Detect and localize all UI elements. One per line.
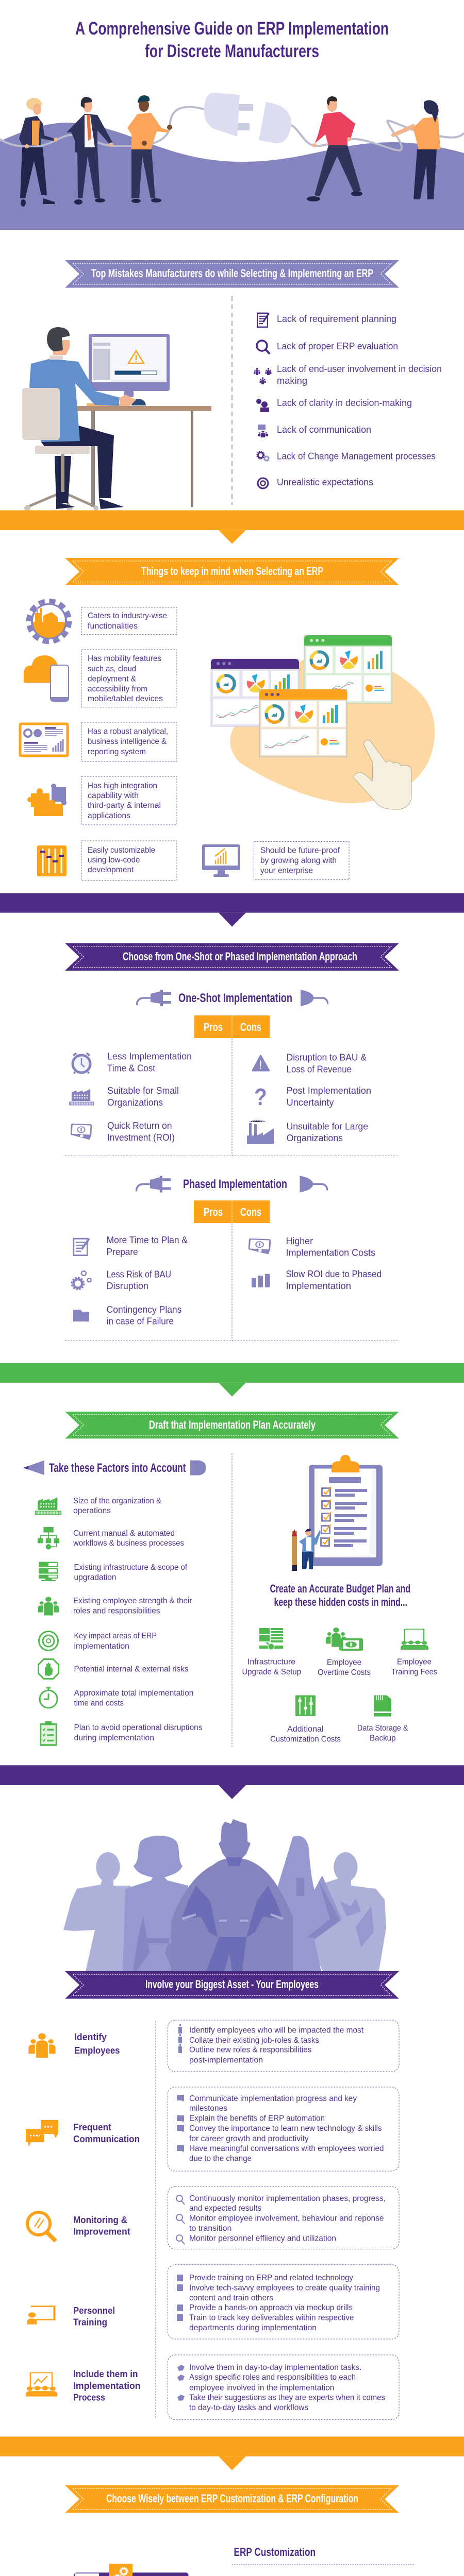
one-shot heading with plugs [137, 990, 328, 1006]
factor: infrastructure: Existing infrastructure & scope of [74, 1563, 188, 1572]
hero right back [308, 1852, 386, 1971]
label [73, 2305, 115, 2328]
illustration: laptop customization [22, 2564, 206, 2576]
con: uncertainty [254, 1083, 371, 1110]
details box: Involve them in day-to-day implementation tasks. [189, 2363, 361, 2372]
details box [168, 2020, 399, 2072]
con: disruption: Loss of Revenue [287, 1063, 352, 1075]
details box: Communicate implementation progress and key [189, 2094, 357, 2103]
factor: risks [38, 1659, 189, 1679]
hidden costs [242, 1628, 437, 1743]
purple window [211, 659, 299, 726]
factor: employee strength: roles and responsibilities [73, 1607, 160, 1616]
factor: workflows: Current manual & automated [73, 1529, 175, 1538]
factor: time and costs: time and costs [74, 1699, 124, 1707]
icon: industry gear [29, 601, 69, 641]
con: slow roi: Slow ROI due to Phased [286, 1268, 382, 1279]
box: mobility: such as, cloud [88, 665, 136, 673]
factor: disruptions [40, 1721, 202, 1746]
cost: overtime [318, 1628, 371, 1677]
box: future-proof: by growing along with [260, 856, 337, 865]
phased heading with plugs: Phased Implementation [183, 1177, 287, 1191]
details box: Involve tech-savvy employees to create quality training [189, 2283, 380, 2292]
details box [168, 2265, 399, 2339]
box: analytics: business intelligence & [88, 737, 167, 746]
pros cons tabs: Pros [204, 1206, 223, 1218]
box: integration: Has high integration [88, 782, 157, 790]
icon: magnifier [27, 2212, 56, 2241]
heading: factors: Take these Factors into Account [49, 1461, 186, 1475]
phased cons [249, 1235, 382, 1291]
box: integration: third-party & internal [88, 801, 161, 810]
item: clarity [256, 397, 412, 412]
cost: overtime: Employee [327, 1658, 361, 1667]
plug [204, 93, 291, 143]
con: higher costs: Implementation Costs [286, 1247, 375, 1258]
cost: storage [357, 1695, 408, 1743]
factor: risks: Potential internal & external risks [74, 1665, 189, 1674]
box: integration: applications [88, 811, 130, 820]
details box: Collate their existing job-roles & tasks [189, 2036, 319, 2045]
person with pencil [292, 1529, 321, 1571]
title: for Discrete Manufacturers [145, 41, 319, 61]
label: Identify [74, 2031, 107, 2042]
box: customizable [81, 841, 177, 880]
box: mobility: deployment & [88, 675, 136, 684]
phased pros [72, 1234, 188, 1326]
person 5 [391, 100, 440, 206]
banner: employees: Involve your Biggest Asset - Your Employees [145, 1978, 319, 1991]
label: Employees [74, 2045, 120, 2056]
cost: customization [270, 1695, 341, 1743]
factor: size: Size of the organization & [73, 1497, 161, 1505]
banner: customization vs configuration: Choose Wisely between ERP Customization & ERP Configuration [106, 2492, 358, 2505]
con: higher costs [249, 1235, 375, 1258]
details box [168, 2355, 399, 2420]
banner: top mistakes [65, 260, 399, 287]
icon: chat bubbles [26, 2120, 58, 2147]
pro: small organizations [69, 1085, 179, 1108]
box: mobility: accessibility from [88, 685, 147, 693]
details box: to day-to-day tasks and workflows [189, 2403, 308, 2412]
item: requirement planning: Lack of requirement planning [277, 313, 396, 324]
label: Include them in [73, 2368, 138, 2379]
details box: Convey the importance to learn new technology & skills [189, 2124, 382, 2133]
row: identify employees [28, 2020, 399, 2072]
item: end-user involvement: making [277, 375, 307, 386]
cost: training fees: Employee [397, 1658, 432, 1667]
factor: impact: implementation [74, 1642, 129, 1651]
pro: more time: Prepare [107, 1246, 138, 1257]
section divider: orange [0, 510, 464, 544]
illustration: dashboards and hand [211, 635, 435, 809]
one-shot heading with plugs: One-Shot Implementation [178, 991, 292, 1005]
orange window [259, 689, 347, 757]
details box: Explain the benefits of ERP automation [189, 2114, 325, 2123]
item: expectations: Unrealistic expectations [277, 477, 373, 487]
banner: implementation plan: Draft that Implementation Plan Accurately [149, 1418, 316, 1431]
person 4 [307, 96, 362, 201]
pro: contingency [73, 1304, 181, 1326]
person 3 [127, 95, 172, 203]
pros cons tabs: Pros [204, 1021, 223, 1033]
cost: infrastructure: Upgrade & Setup [242, 1668, 301, 1676]
box: customizable: using low-code [88, 856, 140, 865]
cost: storage: Backup [370, 1734, 396, 1743]
details box: milestones [189, 2104, 227, 2113]
details box: Continuously monitor implementation phases, progress, [189, 2194, 386, 2203]
illustration: checklist clipboard [292, 1455, 383, 1571]
label: Training [73, 2317, 107, 2328]
illustration: man at computer with warning [22, 327, 211, 511]
label [73, 2122, 140, 2144]
pro: quick roi [71, 1120, 175, 1143]
box: mobility [81, 650, 177, 707]
pros cons tabs [194, 1200, 270, 1223]
details box: departments during implementation [189, 2324, 317, 2332]
factor: time and costs [40, 1688, 194, 1708]
section divider: purple [0, 1765, 464, 1799]
details box: and expected results [189, 2204, 261, 2213]
pro: contingency: in case of Failure [107, 1316, 174, 1326]
details box [168, 2087, 399, 2171]
pro: more time [74, 1234, 188, 1257]
pro: contingency: Contingency Plans [107, 1304, 181, 1315]
details box: due to the change [189, 2155, 252, 2163]
row: frequent communication [26, 2087, 399, 2171]
hero left back [63, 1852, 130, 1971]
details box: Provide training on ERP and related technology [189, 2274, 353, 2282]
details box: content and train others [189, 2294, 273, 2302]
hero woman left [123, 1836, 188, 1971]
pro: less risk: Disruption [107, 1280, 148, 1291]
banner: things to keep in mind: Things to keep in mind when Selecting an ERP [141, 565, 323, 578]
label: Improvement [73, 2226, 130, 2237]
icon: analytics panel [20, 724, 68, 756]
item: evaluation: Lack of proper ERP evaluation [277, 341, 398, 351]
details box: Monitor personnel effiiency and utilization [189, 2234, 336, 2243]
one-shot pros [69, 1051, 192, 1143]
factor: size: operations [73, 1506, 111, 1515]
pros cons tabs [194, 1015, 270, 1038]
cost: infrastructure: Infrastructure [247, 1658, 295, 1667]
card: gears [109, 2564, 132, 2576]
heading: factors [23, 1460, 206, 1476]
one-shot cons [247, 1052, 371, 1144]
section divider: green [0, 1363, 464, 1397]
heading: budget plan [270, 1582, 410, 1608]
label [73, 2368, 141, 2403]
pro: small organizations: Suitable for Small [107, 1085, 179, 1096]
box: customizable: Easily customizable [88, 846, 155, 855]
banner: customization vs configuration [65, 2485, 399, 2513]
person 1 [19, 98, 58, 207]
banner: one-shot or phased [65, 943, 399, 971]
icon: sliders [37, 845, 67, 876]
pros cons tabs: Cons [240, 1206, 261, 1218]
item: end-user involvement: Lack of end-user involvement in decision [277, 363, 442, 374]
box: future-proof [254, 842, 349, 880]
con: large organizations: Unsuitable for Large [287, 1121, 368, 1132]
label: Personnel [73, 2305, 115, 2316]
pro: less risk: Less Risk of BAU [107, 1269, 171, 1280]
banner: employees [65, 1971, 399, 1999]
person 2 [67, 97, 113, 205]
vertical divider [231, 296, 233, 505]
heading: budget plan: Create an Accurate Budget Plan and [270, 1582, 410, 1595]
banner: one-shot or phased: Choose from One-Shot or Phased Implementation Approach [123, 950, 357, 963]
box: industry-wise: functionalities [88, 622, 138, 631]
box: future-proof: Should be future-proof [260, 846, 340, 855]
factor: impact: Key impact areas of ERP [74, 1632, 157, 1640]
title [75, 19, 389, 61]
details box: employee involved in the implementation [189, 2383, 335, 2392]
pro: more time: More Time to Plan & [107, 1234, 188, 1245]
cost: storage: Data Storage & [357, 1724, 408, 1733]
factor: time and costs: Approximate total implementation [74, 1689, 194, 1698]
item: communication: Lack of communication [277, 424, 371, 435]
details box: Provide a hands-on approach via mockup drills [189, 2303, 353, 2312]
con: uncertainty: Post Implementation [287, 1085, 371, 1096]
item: requirement planning [257, 313, 396, 327]
factor: size [35, 1497, 161, 1515]
details box: Have meaningful conversations with employees worried [189, 2144, 384, 2153]
box: integration: capability with [88, 791, 139, 800]
label [73, 2214, 130, 2237]
label: Implementation [73, 2380, 141, 2391]
factors list [35, 1497, 202, 1746]
box: integration [81, 776, 177, 825]
icon: puzzle [27, 784, 67, 816]
item: change management: Lack of Change Management processes [277, 450, 436, 462]
pro: time and cost: Time & Cost [107, 1062, 155, 1073]
section divider: purple [0, 893, 464, 927]
factor: disruptions: Plan to avoid operational disruptions [74, 1723, 202, 1732]
cost: customization: Additional [287, 1725, 324, 1734]
factor: employee strength [38, 1597, 192, 1616]
factor: employee strength: Existing employee strength & their [73, 1597, 192, 1605]
factor: disruptions: during implementation [74, 1734, 154, 1742]
cost: infrastructure [242, 1628, 301, 1676]
details box: to transition [189, 2224, 231, 2233]
con: disruption [253, 1052, 367, 1075]
green window [304, 635, 392, 703]
box: mobility: Has mobility features [88, 654, 161, 663]
box: customizable: development [88, 866, 134, 874]
row: monitoring [27, 2187, 399, 2249]
illustration: employees as superheroes [63, 1819, 386, 1971]
hero centre [171, 1819, 293, 1971]
factor: impact [39, 1631, 157, 1651]
con: uncertainty: Uncertainty [287, 1097, 334, 1108]
pro: less risk [72, 1269, 171, 1291]
box: analytics: reporting system [88, 748, 146, 756]
label: Frequent [73, 2122, 111, 2132]
details box [168, 2187, 399, 2249]
phased heading with plugs [136, 1176, 327, 1193]
label [74, 2031, 120, 2056]
con: uncertainty: ? [254, 1083, 267, 1110]
pros cons tabs: Cons [240, 1021, 261, 1033]
icon: monitor growth [202, 844, 240, 877]
keep in mind panel [20, 601, 349, 880]
heading: budget plan: keep these hidden costs in mind... [274, 1596, 407, 1608]
box: industry-wise: Caters to industry-wise [88, 612, 167, 620]
item: end-user involvement [254, 363, 442, 386]
banner: things to keep in mind [65, 558, 399, 585]
hand [354, 740, 411, 809]
box: industry-wise [81, 607, 177, 635]
pro: time and cost [73, 1051, 192, 1073]
mistakes list [254, 313, 442, 488]
cost: customization: Customization Costs [270, 1735, 341, 1743]
cost: training fees: Training Fees [391, 1668, 437, 1676]
hero illustration: people pulling a plug cable [0, 93, 464, 230]
box: analytics: Has a robust analytical, [88, 727, 168, 736]
details box: post-implementation [189, 2056, 263, 2064]
card: pie [75, 2573, 99, 2576]
box: mobility: mobile/tablet devices [88, 694, 163, 703]
con: slow roi: Implementation [286, 1280, 351, 1291]
pro: quick roi: Investment (ROI) [107, 1132, 175, 1143]
con: large organizations [247, 1121, 368, 1144]
label: Process [73, 2392, 105, 2403]
details box: for career growth and productivity [189, 2134, 309, 2143]
icon: employees [28, 2033, 56, 2058]
details box: Assign specific roles and responsibilities to each [189, 2373, 356, 2382]
pro: small organizations: Organizations [107, 1097, 163, 1108]
row: include in implementation [26, 2355, 399, 2420]
icon: trainer [27, 2307, 54, 2325]
factor: workflows: workflows & business processes [73, 1539, 184, 1548]
details box: Take their suggestions as they are experts when it comes [189, 2394, 385, 2402]
item: communication [258, 424, 371, 437]
factor: workflows [38, 1527, 184, 1550]
label: Monitoring & [73, 2214, 127, 2225]
box: analytics [81, 722, 177, 761]
customization heading: ERP Customization [234, 2546, 316, 2558]
factor: infrastructure [39, 1562, 188, 1582]
item: evaluation [257, 341, 398, 354]
details box: Outline new roles & responsibilities [189, 2046, 311, 2055]
hero woman right [273, 1836, 342, 1971]
details box: Identify employees who will be impacted the most [189, 2026, 364, 2035]
label: Communication [73, 2133, 140, 2144]
pro: time and cost: Less Implementation [107, 1051, 192, 1062]
item: clarity: Lack of clarity in decision-making [277, 397, 412, 408]
pro: quick roi: Quick Return on [107, 1120, 172, 1131]
cost: training fees [391, 1629, 437, 1676]
details box: Train to track key deliverables within respective [189, 2313, 354, 2323]
box: future-proof: your enterprise [260, 867, 313, 875]
icon: group with chart [26, 2372, 57, 2397]
cost: overtime: Overtime Costs [318, 1668, 371, 1677]
details box: Monitor employee involvement, behaviour and reponse [189, 2214, 384, 2223]
factor: infrastructure: upgradation [74, 1573, 117, 1582]
con: large organizations: Organizations [287, 1132, 343, 1143]
con: higher costs: Higher [286, 1235, 313, 1246]
con: disruption: Disruption to BAU & [287, 1052, 367, 1063]
banner: implementation plan [65, 1412, 399, 1438]
con: slow roi [252, 1268, 382, 1291]
row: personnel training [27, 2265, 399, 2339]
icon: cloud and phone [24, 655, 69, 701]
section divider: orange [0, 2436, 464, 2470]
